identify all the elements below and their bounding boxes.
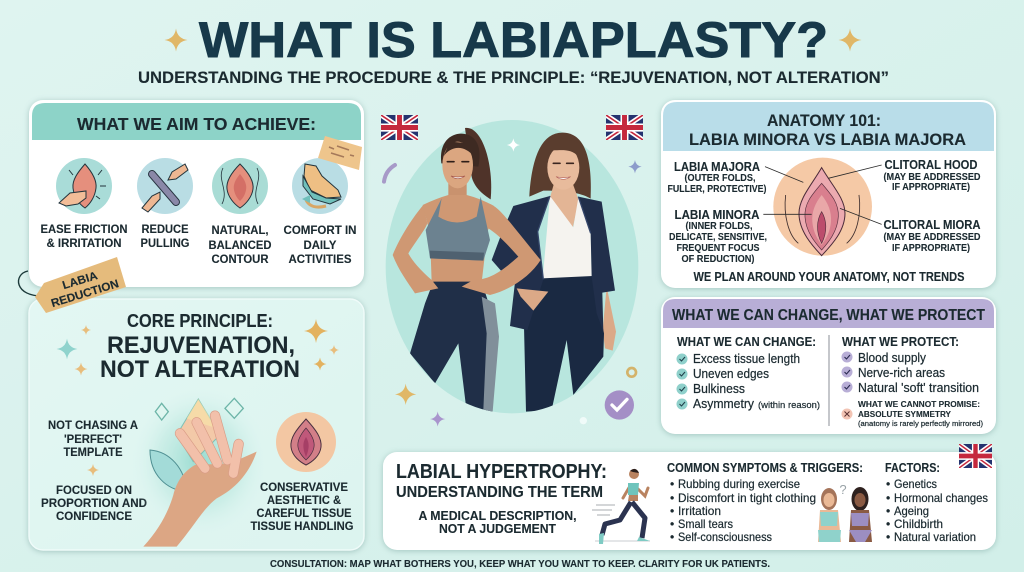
label: reduce pulling (140, 222, 190, 250)
icon: anatomy circle (276, 412, 336, 472)
list: factors: Natural variation (894, 530, 976, 544)
sparkles (56, 319, 339, 376)
label: labia majora (668, 160, 766, 195)
list: factors: • (886, 530, 890, 544)
panel header: change and protect (663, 299, 994, 328)
tag: labia reduction: REDUCTION (50, 278, 120, 310)
text: conservative aesthetic: TISSUE HANDLING (250, 519, 354, 533)
callout: cannot promise (842, 399, 983, 428)
text: focused on proportion: PROPORTION AND (41, 496, 147, 510)
panel: anatomy 101 (661, 100, 996, 288)
icon: runner (592, 469, 650, 544)
column: what we protect: WHAT WE PROTECT: (842, 335, 959, 349)
subtitle: UNDERSTANDING THE PROCEDURE & THE PRINCIPLE: “REJUVENATION, NOT ALTERATION” (138, 68, 889, 87)
label: clitoral hood: (MAY BE ADDRESSED (884, 171, 981, 183)
list: symptoms: Irritation (678, 504, 721, 518)
list: factors: • (886, 517, 890, 531)
icon: uk flag left (381, 115, 418, 140)
list: factors: FACTORS: (885, 461, 940, 475)
leader lines (763, 165, 882, 224)
list: symptoms (667, 461, 863, 544)
text: medical description: A MEDICAL DESCRIPTION, (418, 508, 576, 523)
label: labia minora: FREQUENT FOCUS (676, 242, 760, 254)
label: clitoral miora (884, 218, 981, 254)
heading: anatomy: LABIA MINORA VS LABIA MAJORA (689, 130, 966, 149)
label: reduce pulling: PULLING (140, 236, 190, 250)
column: what we can change: (within reason) (758, 400, 820, 411)
list: symptoms: Rubbing during exercise (678, 477, 800, 491)
list: symptoms: • (670, 530, 674, 544)
label: comfort: COMFORT IN (284, 223, 356, 237)
text: focused on proportion: FOCUSED ON (56, 483, 132, 497)
column: what we can change (676, 335, 820, 411)
list: factors: • (886, 504, 890, 518)
heading: anatomy (689, 111, 966, 149)
column: what we can change: Uneven edges (693, 367, 769, 381)
label: clitoral miora: IF APPROPRIATE) (892, 242, 970, 254)
column: what we can change: WHAT WE CAN CHANGE: (677, 335, 816, 349)
label: balanced contour: BALANCED (208, 238, 272, 252)
label: labia minora: LABIA MINORA (674, 208, 760, 222)
heading: core principle: CORE PRINCIPLE: (127, 311, 273, 331)
column: what we can change: Asymmetry (693, 397, 755, 411)
label: reduce pulling: REDUCE (142, 222, 188, 236)
label: labia minora (669, 208, 767, 265)
tag: labia reduction: LABIA (61, 270, 99, 292)
text: medical description (418, 508, 576, 536)
tag: labia reduction (19, 257, 126, 313)
list: factors (885, 461, 988, 544)
label: clitoral hood: IF APPROPRIATE) (892, 181, 970, 193)
list: factors: • (886, 491, 890, 505)
text: conservative aesthetic: CAREFUL TISSUE (256, 506, 352, 520)
label: balanced contour (208, 223, 272, 266)
list: factors: • (886, 477, 890, 491)
label: labia majora: (OUTER FOLDS, (684, 172, 756, 184)
callout: cannot promise: ABSOLUTE SYMMETRY (858, 409, 951, 419)
column: what we protect (842, 335, 979, 395)
label: ease friction: EASE FRICTION (40, 222, 128, 236)
oval backdrop (386, 120, 638, 413)
panel: core principle (29, 299, 364, 550)
column: what we can change: Excess tissue length (693, 352, 800, 366)
illustration: two women in oval (384, 120, 642, 427)
label: labia majora: LABIA MAJORA (674, 160, 760, 174)
label: ease friction: & IRRITATION (46, 236, 122, 250)
text: not chasing (48, 418, 138, 459)
callout: cannot promise: (anatomy is rarely perfectly mirrored) (858, 419, 983, 428)
label: clitoral miora: CLITORAL MIORA (884, 218, 980, 232)
text: conservative aesthetic: AESTHETIC & (267, 493, 341, 507)
heading: labial hypertrophy: LABIAL HYPERTROPHY: (396, 461, 607, 483)
title: WHAT IS LABIAPLASTY? (199, 12, 828, 68)
label: clitoral miora: (MAY BE ADDRESSED (884, 231, 981, 243)
heading: core principle: REJUVENATION, (107, 332, 295, 359)
text: not chasing: TEMPLATE (64, 445, 122, 459)
small tag (318, 136, 362, 170)
list: symptoms: Self-consciousness (678, 530, 772, 544)
label: labia majora: FULLER, PROTECTIVE) (668, 183, 766, 195)
label: clitoral hood: CLITORAL HOOD (884, 158, 978, 172)
text: medical description: NOT A JUDGEMENT (439, 521, 556, 536)
list: symptoms: • (670, 504, 674, 518)
list: symptoms: COMMON SYMPTOMS & TRIGGERS: (667, 461, 863, 475)
callout: cannot promise: WHAT WE CANNOT PROMISE: (858, 399, 980, 409)
heading: core principle: NOT ALTERATION (100, 356, 300, 383)
column: what we protect: Blood supply (858, 351, 927, 365)
column: what we can change: Bulkiness (693, 382, 745, 396)
figures (393, 128, 616, 412)
icon: uk flag bottom (959, 444, 992, 468)
column: what we protect: Natural 'soft' transition (858, 381, 979, 395)
panel: labial hypertrophy (383, 444, 996, 550)
icon: reduce pulling (137, 158, 193, 214)
woman in sportswear (393, 128, 541, 412)
footer: CONSULTATION: MAP WHAT BOTHERS YOU, KEEP WHAT YOU WANT TO KEEP. CLARITY FOR UK PATIENTS. (270, 558, 770, 570)
heading: core principle (100, 311, 300, 383)
illustration: hand with leaf (130, 385, 270, 547)
caption: anatomy: WE PLAN AROUND YOUR ANATOMY, NOT TRENDS (694, 270, 964, 284)
list: symptoms: • (670, 477, 674, 491)
text: focused on proportion: CONFIDENCE (56, 509, 132, 523)
label: labia minora: (INNER FOLDS, (686, 220, 753, 232)
list: symptoms: • (670, 517, 674, 531)
panel header: anatomy (663, 102, 994, 151)
list: factors: Childbirth (894, 517, 943, 531)
heading: aim: WHAT WE AIM TO ACHIEVE: (77, 114, 316, 134)
label: balanced contour: NATURAL, (212, 223, 268, 237)
label: clitoral hood (884, 158, 981, 193)
list: factors: Ageing (894, 504, 929, 518)
icon: two women thinking (818, 482, 872, 542)
list: symptoms: • (670, 491, 674, 505)
text: conservative aesthetic: CONSERVATIVE (260, 480, 348, 494)
heading: change and protect: WHAT WE CAN CHANGE, WHAT WE PROTECT (672, 307, 985, 324)
woman in suit (492, 133, 616, 412)
panel header: aim (32, 103, 361, 140)
icon: two women thinking: ? (839, 482, 847, 497)
label: comfort: DAILY (304, 238, 336, 252)
icon: comfort (292, 158, 348, 214)
heading: labial hypertrophy (396, 461, 607, 501)
column: what we protect: Nerve-rich areas (858, 366, 945, 380)
label: labia minora: DELICATE, SENSITIVE, (669, 231, 767, 243)
label: balanced contour: CONTOUR (212, 252, 269, 266)
list: symptoms: Small tears (678, 517, 733, 531)
text: not chasing: NOT CHASING A (48, 418, 138, 432)
text: conservative aesthetic (250, 480, 354, 533)
icon: ease friction (56, 158, 112, 214)
list: factors: Genetics (894, 477, 937, 491)
decorative sparkles and badges (384, 138, 642, 427)
label: ease friction (40, 222, 128, 250)
icon: uk flag right (606, 115, 643, 140)
label: comfort: ACTIVITIES (288, 252, 352, 266)
panel: what we aim to achieve (29, 100, 364, 287)
diagram: anatomy (763, 158, 882, 256)
label: comfort (284, 223, 356, 266)
heading: anatomy: ANATOMY 101: (767, 111, 881, 130)
text: not chasing: 'PERFECT' (64, 432, 122, 446)
panel: what we can change, what we protect (661, 297, 996, 434)
text: focused on proportion (41, 483, 147, 523)
list: symptoms: Discomfort in tight clothing (678, 491, 816, 505)
icon: balanced contour (212, 158, 268, 214)
label: labia minora: OF REDUCTION) (682, 253, 754, 265)
badge: check (605, 390, 634, 420)
list: factors: Hormonal changes (894, 491, 988, 505)
heading: labial hypertrophy: UNDERSTANDING THE TERM (396, 484, 603, 501)
